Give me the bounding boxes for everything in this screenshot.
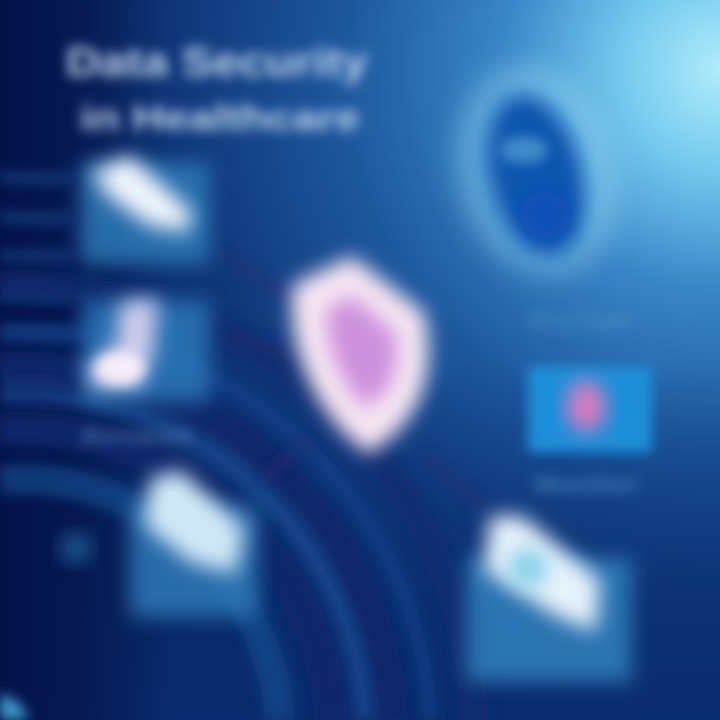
- small label left: Access: [80, 423, 192, 450]
- title: [66, 38, 369, 138]
- panel: card bottom right: [466, 516, 632, 682]
- icon: pale document: [144, 470, 244, 574]
- icon: pink circle: [566, 380, 606, 432]
- small label right top: Encrypt: [530, 308, 631, 333]
- panel: card top left: [80, 156, 210, 264]
- title: Data Security: [66, 38, 369, 85]
- small label right bottom: Monitor: [534, 472, 639, 497]
- panel: card bottom center-left: [130, 470, 258, 617]
- icon: white cloud shape: [92, 156, 192, 232]
- bottom shade: [0, 360, 720, 720]
- horizontal stripes on left edge: [0, 172, 70, 384]
- corner accent bottom left: [0, 694, 28, 720]
- icon: white hand shape: [88, 298, 158, 388]
- panel: card right: [528, 366, 652, 452]
- concentric arcs bottom left: [0, 285, 475, 720]
- icon: padlock in glowing ring: [435, 48, 641, 292]
- icon: pale device: [484, 516, 600, 632]
- connector lines: [222, 255, 485, 510]
- title: in Healthcare: [80, 97, 360, 138]
- panel: card middle left: [82, 298, 210, 402]
- shield: [291, 256, 429, 454]
- small dot bottom left: [61, 533, 91, 563]
- left dark band: [0, 0, 170, 720]
